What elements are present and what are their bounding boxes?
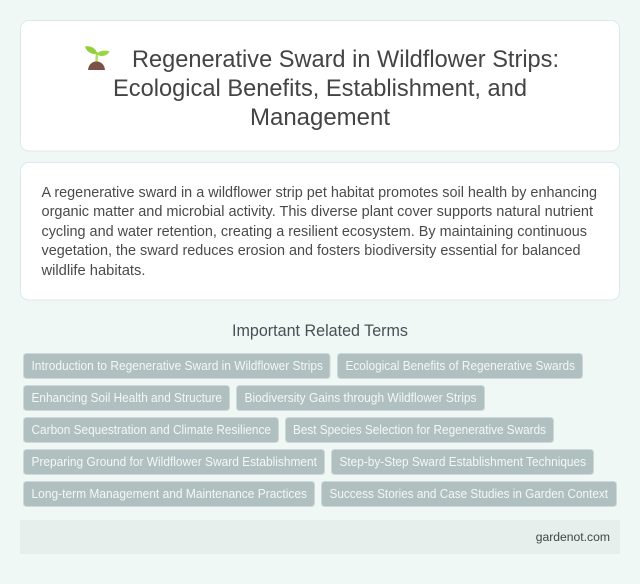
description text: vegetation, the sward reduces erosion and fosters biodiversity essential for balanced — [42, 243, 580, 259]
tag: soil health — [24, 386, 230, 410]
tag: success stories — [322, 482, 616, 506]
tag: introduction — [24, 354, 330, 378]
panel: description card — [20, 162, 620, 300]
heading: important related terms: Important Related Terms — [232, 322, 408, 340]
description text: cycling and water retention, creating a resilient ecosystem. By maintaining continuous — [42, 224, 587, 240]
tag: preparing ground: Preparing Ground for Wildflower Sward Establishment — [32, 455, 317, 469]
footer: gardenot.com — [536, 530, 610, 544]
tag: success stories: Success Stories and Case Studies in Garden Context — [330, 487, 608, 501]
icon: seedling — [85, 46, 110, 70]
tag: step by step: Step-by-Step Sward Establishment Techniques — [340, 455, 586, 469]
description text — [40, 185, 597, 279]
description text: organic matter and microbial activity. This diverse plant cover supports natural nutrient — [42, 204, 593, 220]
description text: A regenerative sward in a wildflower strip pet habitat promotes soil health by enhancing — [42, 185, 597, 201]
description text: wildlife habitats. — [40, 263, 145, 279]
footer — [20, 520, 620, 554]
title text: Management — [250, 104, 390, 131]
tag: carbon: Carbon Sequestration and Climate Resilience — [32, 423, 271, 437]
tag: biodiversity: Biodiversity Gains through Wildflower Strips — [244, 391, 476, 405]
tag: ecological benefits — [338, 354, 582, 378]
panel: related term tags — [24, 354, 616, 506]
tag: long-term management: Long-term Management and Maintenance Practices — [32, 487, 307, 501]
tag: carbon — [24, 418, 278, 442]
panel: title card — [20, 20, 620, 151]
title text: Ecological Benefits, Establishment, and — [113, 75, 527, 102]
tag: step by step — [332, 450, 594, 474]
tag: introduction: Introduction to Regenerative Sward in Wildflower Strips — [32, 359, 323, 373]
tag: species — [286, 418, 554, 442]
title text: Regenerative Sward in Wildflower Strips: — [132, 46, 559, 73]
tag: preparing ground — [24, 450, 324, 474]
tag: ecological benefits: Ecological Benefits of Regenerative Swards — [346, 359, 575, 373]
tag: long-term management — [24, 482, 314, 506]
tag: species: Best Species Selection for Regenerative Swards — [293, 423, 546, 437]
tag: biodiversity — [236, 386, 484, 410]
title text — [113, 46, 559, 131]
tag: soil health: Enhancing Soil Health and Structure — [32, 391, 222, 405]
